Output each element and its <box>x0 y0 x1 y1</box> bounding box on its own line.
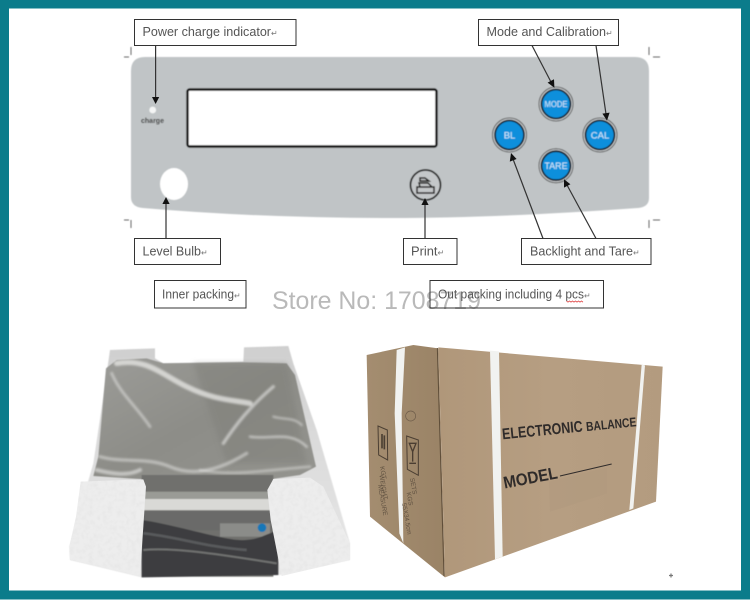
foam block right <box>267 478 350 576</box>
callout: Backlight and Tare <box>522 238 651 264</box>
box print: MODEL <box>502 464 612 493</box>
arrow: print button <box>421 198 429 238</box>
button: CAL: CAL <box>591 130 609 142</box>
arrow: cal button <box>596 46 610 121</box>
button: BL: BL <box>504 130 515 142</box>
box print: ELECTRONIC BALANCE: ELECTRONIC BALANCE <box>501 413 637 443</box>
scale front in bag <box>142 475 278 577</box>
small speck <box>669 574 673 578</box>
box front face <box>438 347 663 577</box>
callout: Out packing: ↵ <box>584 292 591 300</box>
box print: MODEL: MODEL <box>502 464 559 493</box>
arrow: power indicator <box>152 46 159 104</box>
callout: Out packing: Out packing including 4 pcs <box>438 288 584 302</box>
callout: Backlight and Tare: Backlight and Tare <box>530 244 633 258</box>
charge indicator <box>141 107 164 125</box>
callout: Mode and Calibration: ↵ <box>606 29 613 38</box>
charge indicator: charge <box>141 118 164 125</box>
callout: Inner packing: Inner packing <box>162 288 234 302</box>
callout: Print: ↵ <box>438 248 444 258</box>
callout: Out packing <box>430 280 604 308</box>
callout: Power charge indicator: ↵ <box>271 29 278 38</box>
callout: Level Bulb: Level Bulb <box>142 244 201 258</box>
box left face <box>367 345 445 577</box>
level bulb <box>160 168 188 200</box>
button: TARE: TARE <box>544 161 568 171</box>
arrow: mode button <box>532 46 554 88</box>
photo: cardboard box: WEIGHT <box>377 474 389 500</box>
arrow: BL button <box>510 153 543 238</box>
panel body <box>131 57 649 218</box>
box side markings <box>378 411 418 475</box>
callout: Power charge indicator <box>134 20 296 46</box>
straps <box>395 347 645 559</box>
icon: print button <box>410 170 440 200</box>
plastic covered platform <box>93 358 316 479</box>
watermark: Store No: 1708719 <box>272 287 481 315</box>
photo: cardboard box: SETS <box>408 477 418 495</box>
foam block left <box>69 479 146 576</box>
arrows <box>152 46 610 238</box>
arrow: TARE button <box>564 179 596 238</box>
photo: cardboard box: KGS <box>405 492 414 506</box>
callout: Print <box>404 238 457 264</box>
callout: Backlight and Tare: ↵ <box>633 248 640 258</box>
callout: Level Bulb: ↵ <box>201 248 208 258</box>
photo: inner packing <box>69 346 350 577</box>
photo: cardboard box: KGT <box>378 466 387 480</box>
photo: cardboard box: MEASURE <box>376 484 388 516</box>
button: TARE <box>539 149 573 183</box>
photo: cardboard box <box>367 345 663 577</box>
callout: Level Bulb <box>134 238 220 264</box>
button: CAL <box>583 118 617 152</box>
button: BL <box>492 118 526 152</box>
arrow: level bulb <box>162 197 170 238</box>
callout: Mode and Calibration: Mode and Calibration <box>486 25 606 39</box>
foam tray <box>69 346 350 577</box>
photo: cardboard box: 55X34.5cm <box>400 502 412 535</box>
button: MODE: MODE <box>544 99 568 109</box>
display window <box>188 90 436 146</box>
callout: Inner packing <box>154 280 246 308</box>
label patch <box>549 467 607 512</box>
callout: Power charge indicator: Power charge indicator <box>142 25 271 39</box>
crop marks <box>124 47 660 228</box>
callout: Inner packing: ↵ <box>234 292 241 300</box>
callout: Mode and Calibration <box>478 20 618 46</box>
button: MODE <box>539 87 573 121</box>
callout: Print: Print <box>411 244 438 258</box>
control panel <box>124 47 660 228</box>
